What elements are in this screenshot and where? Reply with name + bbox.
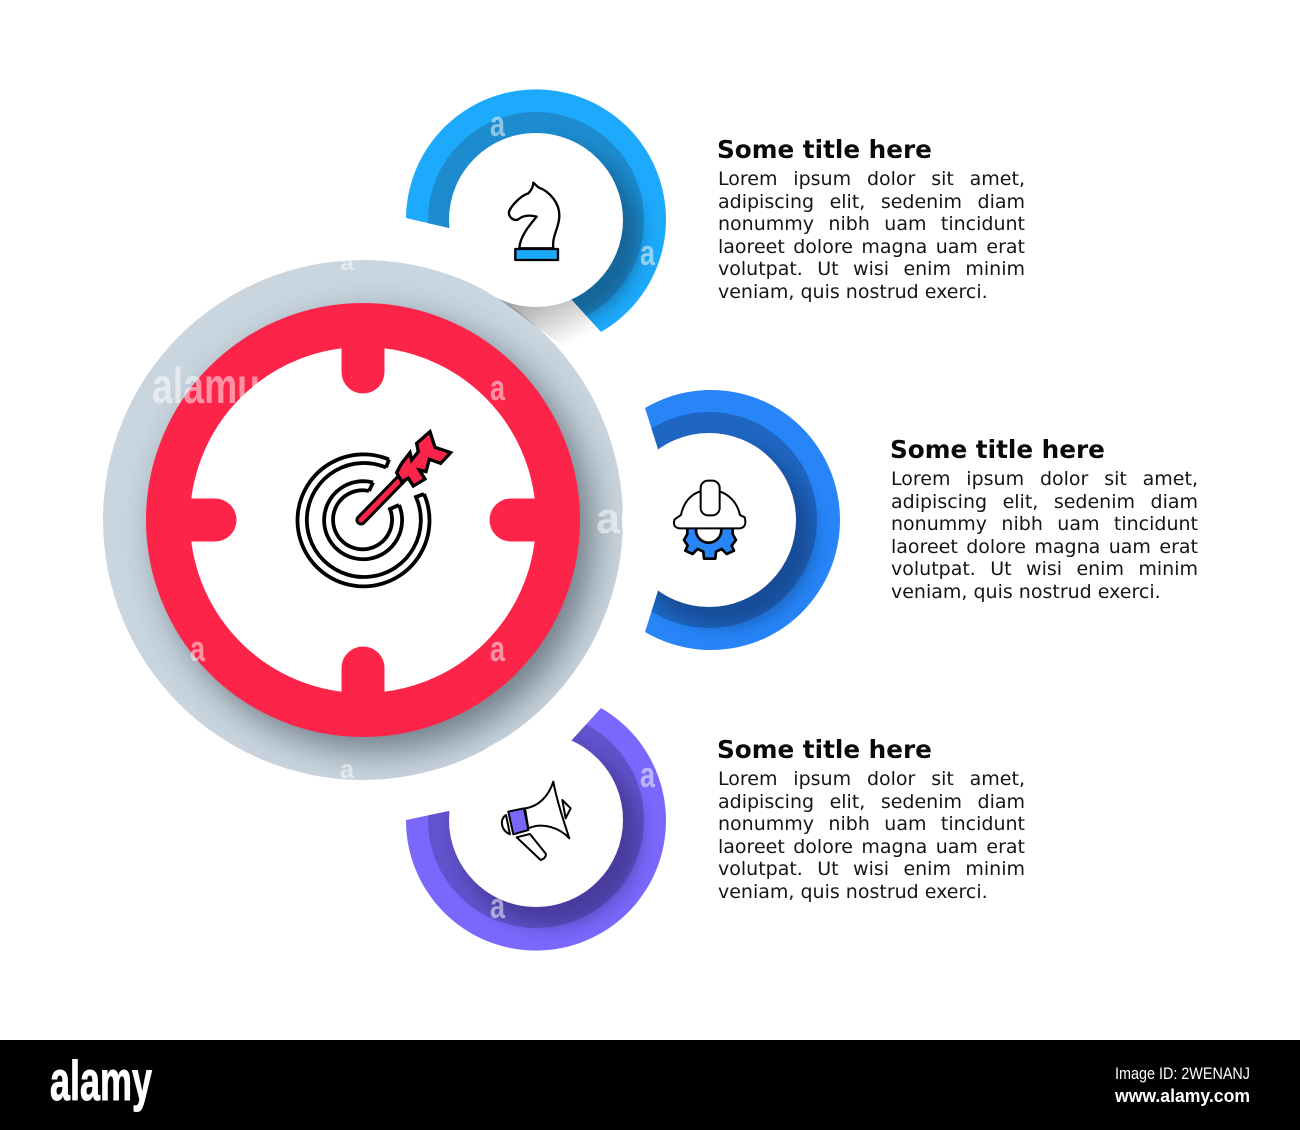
body: middle item — [891, 468, 1198, 602]
watermarks: a — [640, 754, 656, 795]
panel: top ring — [405, 89, 667, 351]
body: bottom item: nonummy nibh uam tincidunt — [718, 813, 1025, 835]
body: bottom item — [718, 768, 1025, 902]
body: middle item: veniam, quis nostrud exerci. — [891, 580, 1161, 602]
watermarks: a — [490, 628, 506, 669]
footer website: www.alamy.com — [1114, 1086, 1250, 1106]
heading: bottom item: Some title here — [717, 735, 932, 764]
icon: chess knight — [509, 183, 559, 260]
body: top item — [718, 168, 1025, 302]
watermarks: a — [490, 103, 506, 144]
top blue arc — [405, 89, 667, 351]
heading: top item: Some title here — [717, 135, 932, 164]
watermarks: a — [640, 232, 656, 273]
cast shadow below top circle — [483, 287, 601, 350]
body: top item: adipiscing elit, sedenim diam — [718, 190, 1025, 212]
body: top item: Lorem ipsum dolor sit amet, — [718, 168, 1025, 190]
watermarks: a — [490, 885, 506, 926]
body: bottom item: Lorem ipsum dolor sit amet, — [718, 768, 1025, 790]
body: middle item: adipiscing elit, sedenim diam — [891, 490, 1198, 512]
body: middle item: volutpat. Ut wisi enim minim — [891, 558, 1198, 580]
middle white circle — [622, 433, 796, 607]
watermarks: a — [190, 628, 206, 669]
watermarks — [152, 103, 656, 926]
gear — [684, 517, 736, 559]
body: middle item: laoreet dolore magna uam erat — [891, 536, 1198, 558]
top white circle — [449, 133, 623, 307]
text block: middle item — [890, 435, 1198, 602]
footer image id: Image ID: 2WENANJ — [1115, 1064, 1250, 1083]
white centre — [183, 340, 543, 700]
watermarks: alamu — [152, 358, 260, 414]
body: bottom item: adipiscing elit, sedenim diam — [718, 790, 1025, 812]
middle blue arc — [645, 390, 840, 650]
red ring with ticks — [168, 325, 558, 715]
panel: bottom ring — [405, 689, 667, 951]
panel: middle ring — [622, 390, 840, 650]
shadow under red ring — [158, 316, 594, 752]
bottom purple arc — [405, 689, 667, 951]
text block: bottom item — [717, 735, 1025, 902]
icon: target with arrow — [297, 432, 451, 586]
icon: helmet and gear — [674, 481, 745, 559]
body: top item: laoreet dolore magna uam erat — [718, 236, 1025, 258]
footer logo: alamy — [50, 1049, 152, 1112]
text block: top item — [717, 135, 1025, 302]
body: top item: veniam, quis nostrud exerci. — [718, 280, 988, 302]
panel: central target — [103, 260, 623, 780]
body: middle item: Lorem ipsum dolor sit amet, — [891, 468, 1198, 490]
bottom white circle — [449, 733, 623, 907]
body: middle item: nonummy nibh uam tincidunt — [891, 513, 1198, 535]
footer bar — [0, 1040, 1300, 1130]
body: bottom item: veniam, quis nostrud exerci. — [718, 880, 988, 902]
body: top item: nonummy nibh uam tincidunt — [718, 213, 1025, 235]
body: bottom item: volutpat. Ut wisi enim minim — [718, 858, 1025, 880]
heading: middle item: Some title here — [890, 435, 1105, 464]
watermarks: a — [490, 367, 506, 408]
body: bottom item: laoreet dolore magna uam erat — [718, 836, 1025, 858]
body: top item: volutpat. Ut wisi enim minim — [718, 258, 1025, 280]
grey outer disc — [103, 260, 623, 780]
icon: megaphone — [502, 782, 571, 860]
watermarks: a — [340, 253, 355, 275]
watermarks: a — [596, 494, 621, 543]
helmet — [674, 490, 745, 528]
watermarks: a — [340, 754, 355, 784]
